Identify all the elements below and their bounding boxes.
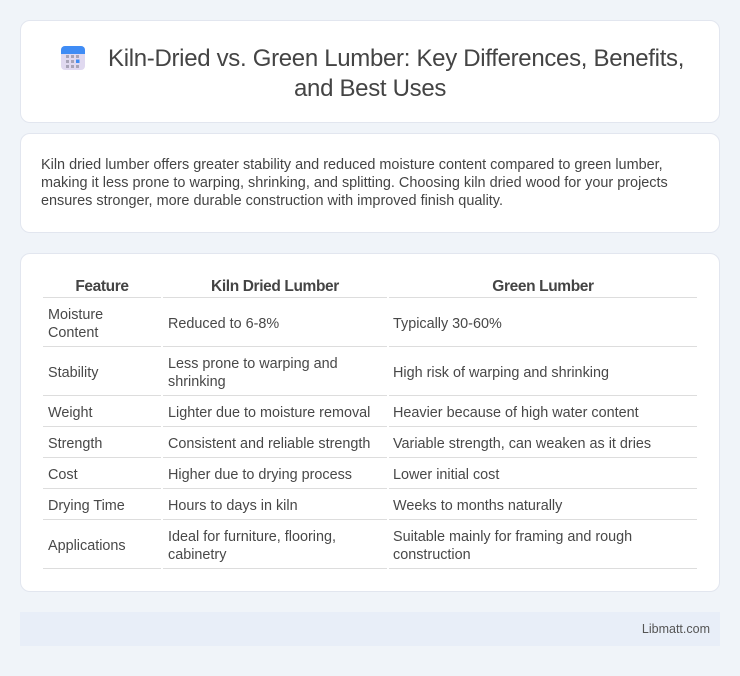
column headers: Green Lumber xyxy=(492,278,594,295)
text: Moisture xyxy=(48,307,103,323)
row: moisture content xyxy=(48,307,502,341)
text: Lighter due to moisture removal xyxy=(168,405,370,421)
icon: calendar xyxy=(61,46,85,70)
panel: introduction card xyxy=(20,133,720,233)
column headers: Kiln Dried Lumber xyxy=(211,278,339,295)
panel: comparison table card xyxy=(20,253,720,592)
text: Higher due to drying process xyxy=(168,467,352,483)
introduction text: ensures stronger, more durable construction with improved finish quality. xyxy=(41,193,503,209)
column headers xyxy=(75,278,594,295)
text: construction xyxy=(393,547,471,563)
row: weight xyxy=(48,405,639,421)
text: Strength xyxy=(48,436,102,452)
row: drying time xyxy=(48,498,562,514)
row: stability xyxy=(48,356,609,390)
introduction text xyxy=(41,157,668,209)
text: Reduced to 6-8% xyxy=(168,316,279,332)
text: Weight xyxy=(48,405,93,421)
text: Weeks to months naturally xyxy=(393,498,562,514)
text: Heavier because of high water content xyxy=(393,405,639,421)
footer text: Libmatt.com xyxy=(642,622,710,636)
text: Content xyxy=(48,325,98,341)
text: Consistent and reliable strength xyxy=(168,436,370,452)
text: Less prone to warping and xyxy=(168,356,338,372)
introduction text: making it less prone to warping, shrinking, and splitting. Choosing kiln dried wood for your projects xyxy=(41,175,668,191)
row: cost xyxy=(48,467,500,483)
text: shrinking xyxy=(168,374,226,390)
text: Lower initial cost xyxy=(393,467,499,483)
title: and Best Uses xyxy=(294,75,446,102)
text: Ideal for furniture, flooring, xyxy=(168,529,336,545)
introduction text: Kiln dried lumber offers greater stability and reduced moisture content compared to green lumber, xyxy=(41,157,663,173)
row: applications xyxy=(48,529,632,563)
text: Drying Time xyxy=(48,498,125,514)
title: Kiln-Dried vs. Green Lumber: Key Differences, Benefits, xyxy=(108,45,684,72)
text: Suitable mainly for framing and rough xyxy=(393,529,632,545)
row: strength xyxy=(48,436,651,452)
footer bar xyxy=(20,612,720,646)
text: cabinetry xyxy=(168,547,226,563)
text: Applications xyxy=(48,538,126,554)
panel: title card xyxy=(20,20,720,123)
text: Typically 30-60% xyxy=(393,316,502,332)
text: High risk of warping and shrinking xyxy=(393,365,609,381)
text: Cost xyxy=(48,467,78,483)
text: Hours to days in kiln xyxy=(168,498,298,514)
column headers: Feature xyxy=(75,278,129,295)
text: Stability xyxy=(48,365,98,381)
text: Variable strength, can weaken as it dries xyxy=(393,436,651,452)
title xyxy=(108,45,684,102)
